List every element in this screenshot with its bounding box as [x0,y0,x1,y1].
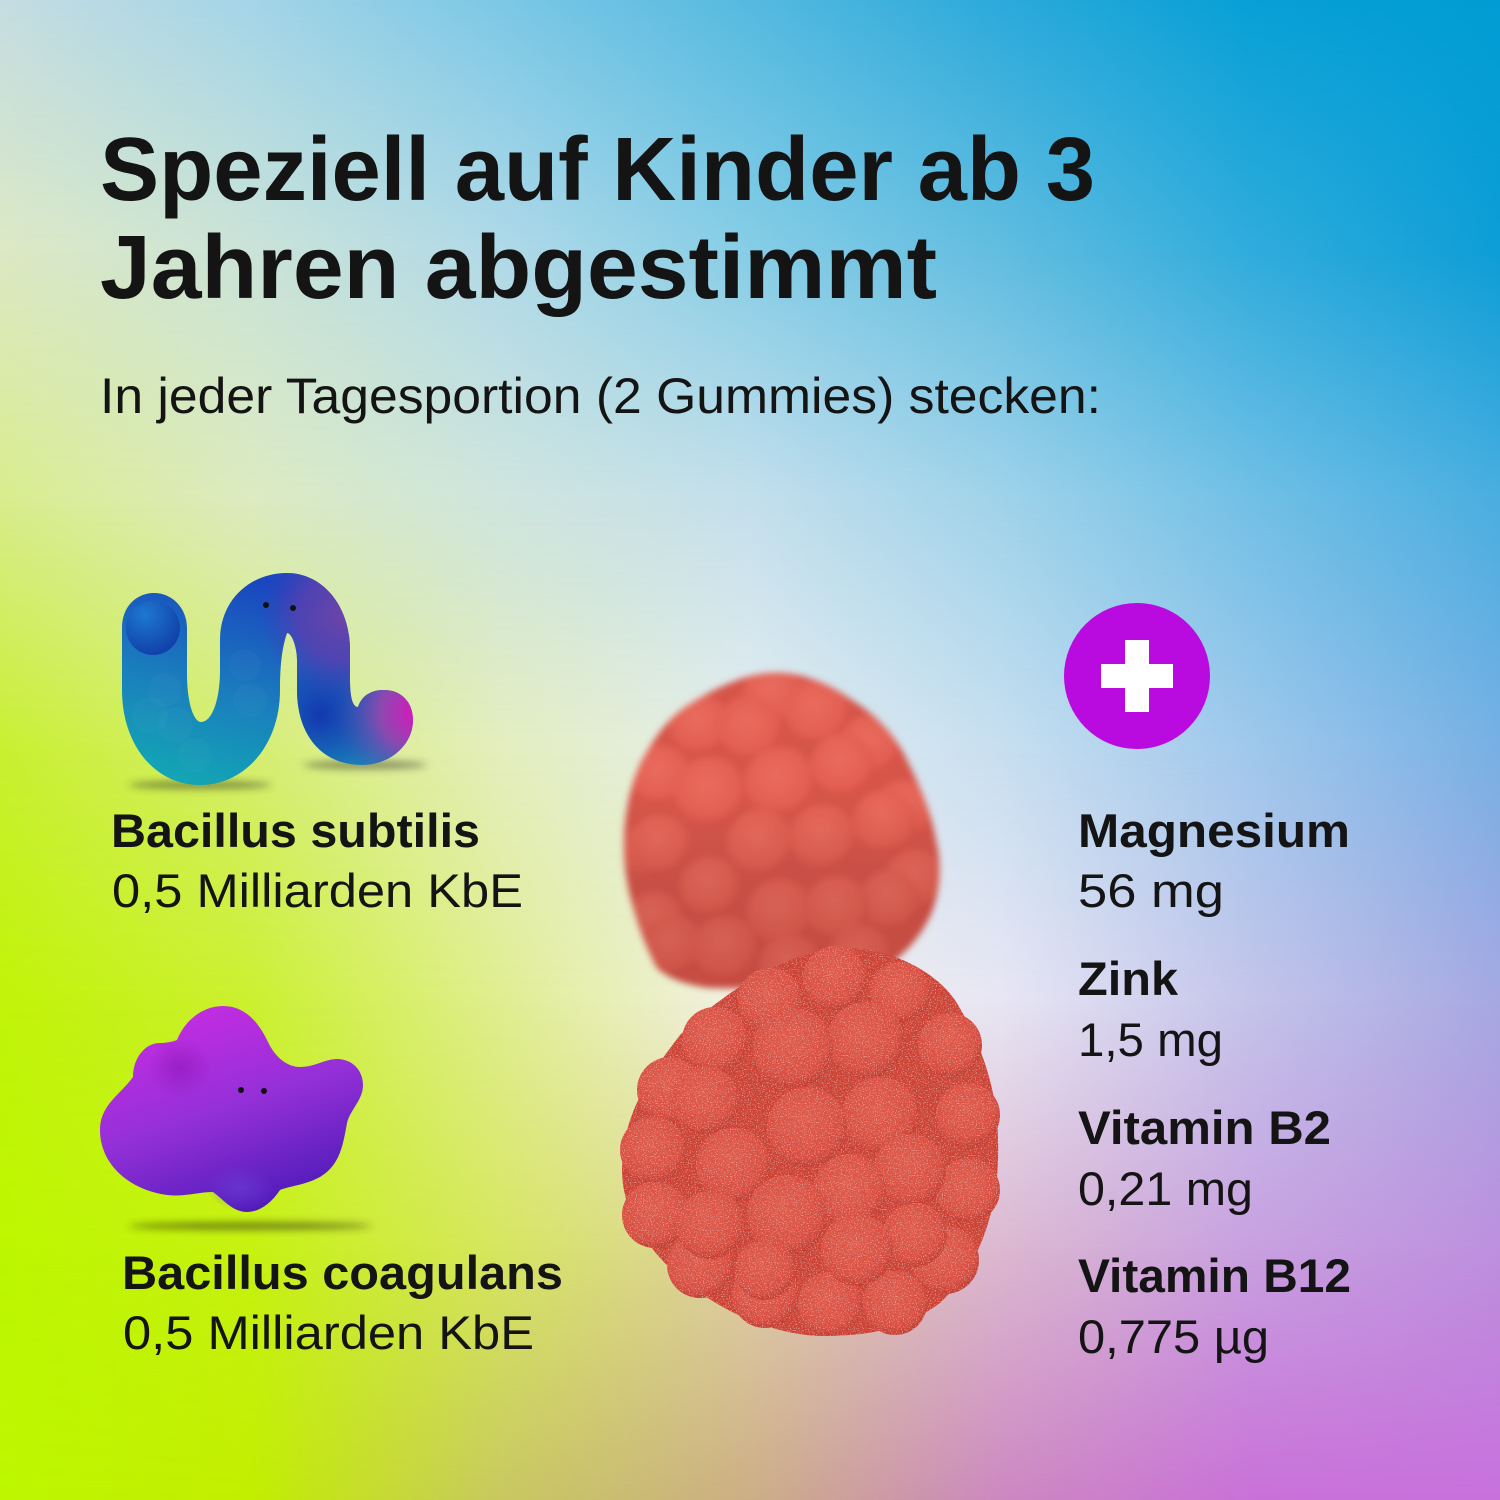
nutrient: Vitamin B12: Vitamin B12 [1078,1249,1351,1302]
icon: purple plus badge [1064,603,1210,749]
raspberry gummy: upper, blurred [620,665,945,995]
title [100,120,1095,318]
subtitle: In jeder Tagesportion (2 Gummies) stecken: [100,368,1101,424]
label: Bacillus subtilis [111,804,523,917]
label: Bacillus coagulans: 0,5 Milliarden KbE [123,1306,534,1359]
nutrient: Zink: 1,5 mg [1078,1013,1223,1066]
label: Bacillus coagulans [122,1246,563,1359]
nutrient: Vitamin B2 [1078,1101,1331,1215]
nutrient: Magnesium: 56 mg [1078,864,1224,917]
nutrient: Vitamin B12: 0,775 µg [1078,1310,1269,1363]
nutrient: Vitamin B2: 0,21 mg [1078,1162,1253,1215]
nutrient: Zink: Zink [1078,952,1179,1005]
nutrient: Magnesium: Magnesium [1078,804,1350,857]
label: Bacillus coagulans: Bacillus coagulans [122,1246,563,1299]
nutrient: Zink [1078,952,1223,1066]
label: Bacillus subtilis: 0,5 Milliarden KbE [112,864,523,917]
label: Bacillus subtilis: Bacillus subtilis [111,804,480,857]
nutrient: Vitamin B2: Vitamin B2 [1078,1101,1331,1154]
title: Jahren abgestimmt [100,218,937,318]
raspberry gummy: lower, sugared [620,946,1000,1336]
nutrient: Magnesium [1078,804,1350,917]
nutrient: Vitamin B12 [1078,1249,1351,1363]
icon: worm bacterium [122,573,428,794]
title: Speziell auf Kinder ab 3 [100,120,1095,220]
icon: blob bacterium [100,1006,372,1230]
